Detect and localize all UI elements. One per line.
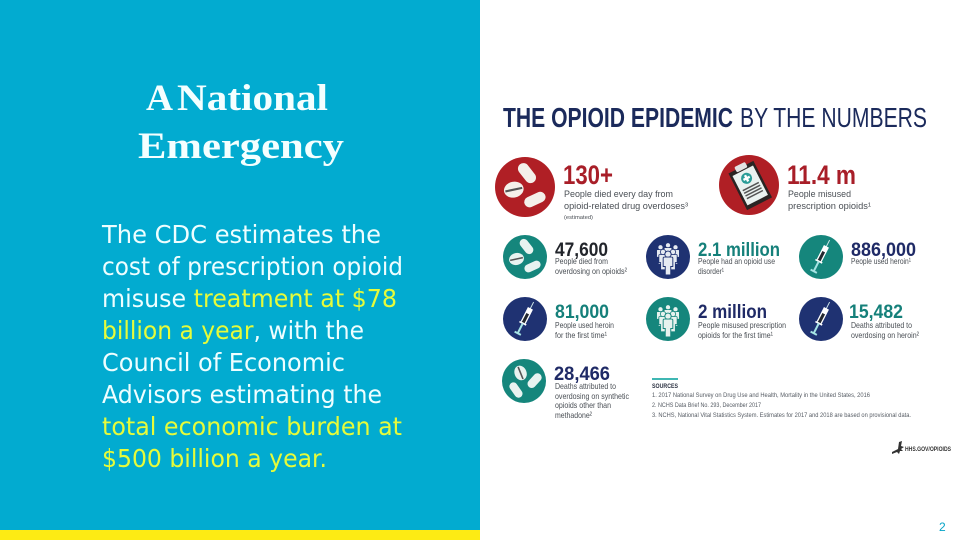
text: 28,466: overdosing on synthetic [555, 391, 630, 401]
text: 28,466: methadone² [555, 410, 592, 420]
icon: navy syringe [503, 297, 547, 341]
text: 130+ deaths per day [563, 160, 688, 221]
heading: A National Emergency: A [146, 78, 173, 119]
text: 11.4 million misused [787, 160, 871, 212]
stat: 15,482 [799, 297, 919, 341]
text block: cost estimates: billion a year, with the [102, 316, 364, 345]
icon: clipboard [719, 155, 779, 215]
text block: cost estimates: The CDC estimates the [101, 220, 381, 249]
text: 15,482: Deaths attributed to [851, 320, 912, 330]
panel: blue background [0, 0, 480, 540]
text: 47,600 [555, 239, 627, 276]
sources: 2. NCHS Data Brief No. 293, December 2017 [652, 403, 762, 409]
text: 11.4 million misused: prescription opioids¹ [788, 201, 871, 212]
text: 28,466: 28,466 [554, 363, 610, 385]
icon: red pills [495, 157, 555, 217]
text: 130+ deaths per day: People died every day from [564, 189, 673, 200]
stat: 2 million [646, 297, 786, 341]
text block: cost estimates: total economic burden at [102, 412, 402, 441]
text: 28,466: Deaths attributed to [555, 381, 616, 391]
stat: 886,000 [799, 235, 916, 279]
text: 2 million: opioids for the first time¹ [698, 330, 773, 340]
text block: cost estimates: Advisors estimating the [102, 380, 382, 409]
sources: 1. 2017 National Survey on Drug Use and Health, Mortality in the United States, 2016 [652, 393, 871, 399]
icon: teal pills [503, 235, 547, 279]
text: 886,000: 886,000 [851, 239, 916, 261]
text: 2 million: 2 million [698, 301, 767, 323]
infographic title: THE OPIOID EPIDEMIC [503, 102, 733, 133]
text: 130+ deaths per day: opioid-related drug overdoses³ [564, 201, 688, 212]
icon: navy syringe [799, 297, 843, 341]
text: 130+ deaths per day: (estimated) [564, 215, 593, 221]
heading: A National Emergency: Emergency [138, 126, 345, 167]
text: 47,600: overdosing on opioids² [555, 266, 627, 276]
yellow footer bar [0, 530, 480, 540]
text: 15,482: overdosing on heroin² [851, 330, 919, 340]
text block: cost estimates: cost of prescription opioid [102, 252, 403, 281]
stat: 2.1 million [646, 235, 780, 279]
text: 11.4 million misused: 11.4 m [787, 160, 856, 190]
stat: 47,600 [503, 235, 627, 279]
text: 47,600: 47,600 [555, 239, 608, 261]
text block: cost estimates: misuse treatment at $78 [102, 284, 397, 313]
icon: teal people [646, 297, 690, 341]
heading: A National Emergency: National [177, 78, 328, 119]
text block: cost estimates: $500 billion a year. [102, 444, 327, 473]
icon: teal pills [502, 359, 546, 403]
text: 15,482 [849, 301, 919, 340]
text: 81,000: 81,000 [555, 301, 609, 323]
stat: 28,466 [502, 359, 630, 420]
text block: cost estimates: Council of Economic [102, 348, 345, 377]
text: 886,000: People used heroin¹ [851, 256, 911, 266]
sources: 3. NCHS, National Vital Statistics System. Estimates for 2017 and 2018 are based on provisional data. [652, 413, 911, 419]
text: 11.4 million misused: People misused [788, 189, 851, 200]
text: 28,466: opioids other than [555, 400, 611, 410]
text: 2.1 million: disorder¹ [698, 266, 724, 276]
heading: A National Emergency [138, 78, 345, 167]
text: 81,000: People used heroin [555, 320, 614, 330]
stat: 11.4 m [719, 155, 871, 215]
sources [652, 378, 911, 419]
text block: cost estimates [101, 220, 403, 473]
text: 28,466 [554, 363, 630, 420]
page number: 2 [939, 520, 946, 534]
text: 2.1 million: 2.1 million [698, 239, 780, 261]
stat: 81,000 [503, 297, 614, 341]
logo: HHS.gov/opioids [892, 441, 951, 454]
text: 15,482: 15,482 [849, 301, 903, 323]
text: 130+ deaths per day: 130+ [563, 160, 613, 190]
text: 81,000: for the first time¹ [555, 330, 607, 340]
icon: teal syringe [799, 235, 843, 279]
stat: 130+ [495, 157, 688, 221]
text: 2.1 million [698, 239, 780, 276]
logo: HHS.gov/opioids: HHS.GOV/OPIOIDS [905, 447, 951, 453]
text: 81,000 [555, 301, 614, 340]
sources: SOURCES [652, 384, 678, 390]
text: 2.1 million: People had an opioid use [698, 256, 775, 266]
text: 2 million [698, 301, 786, 340]
text: 47,600: People died from [555, 256, 608, 266]
icon: navy people [646, 235, 690, 279]
text: 2 million: People misused prescription [698, 320, 786, 330]
